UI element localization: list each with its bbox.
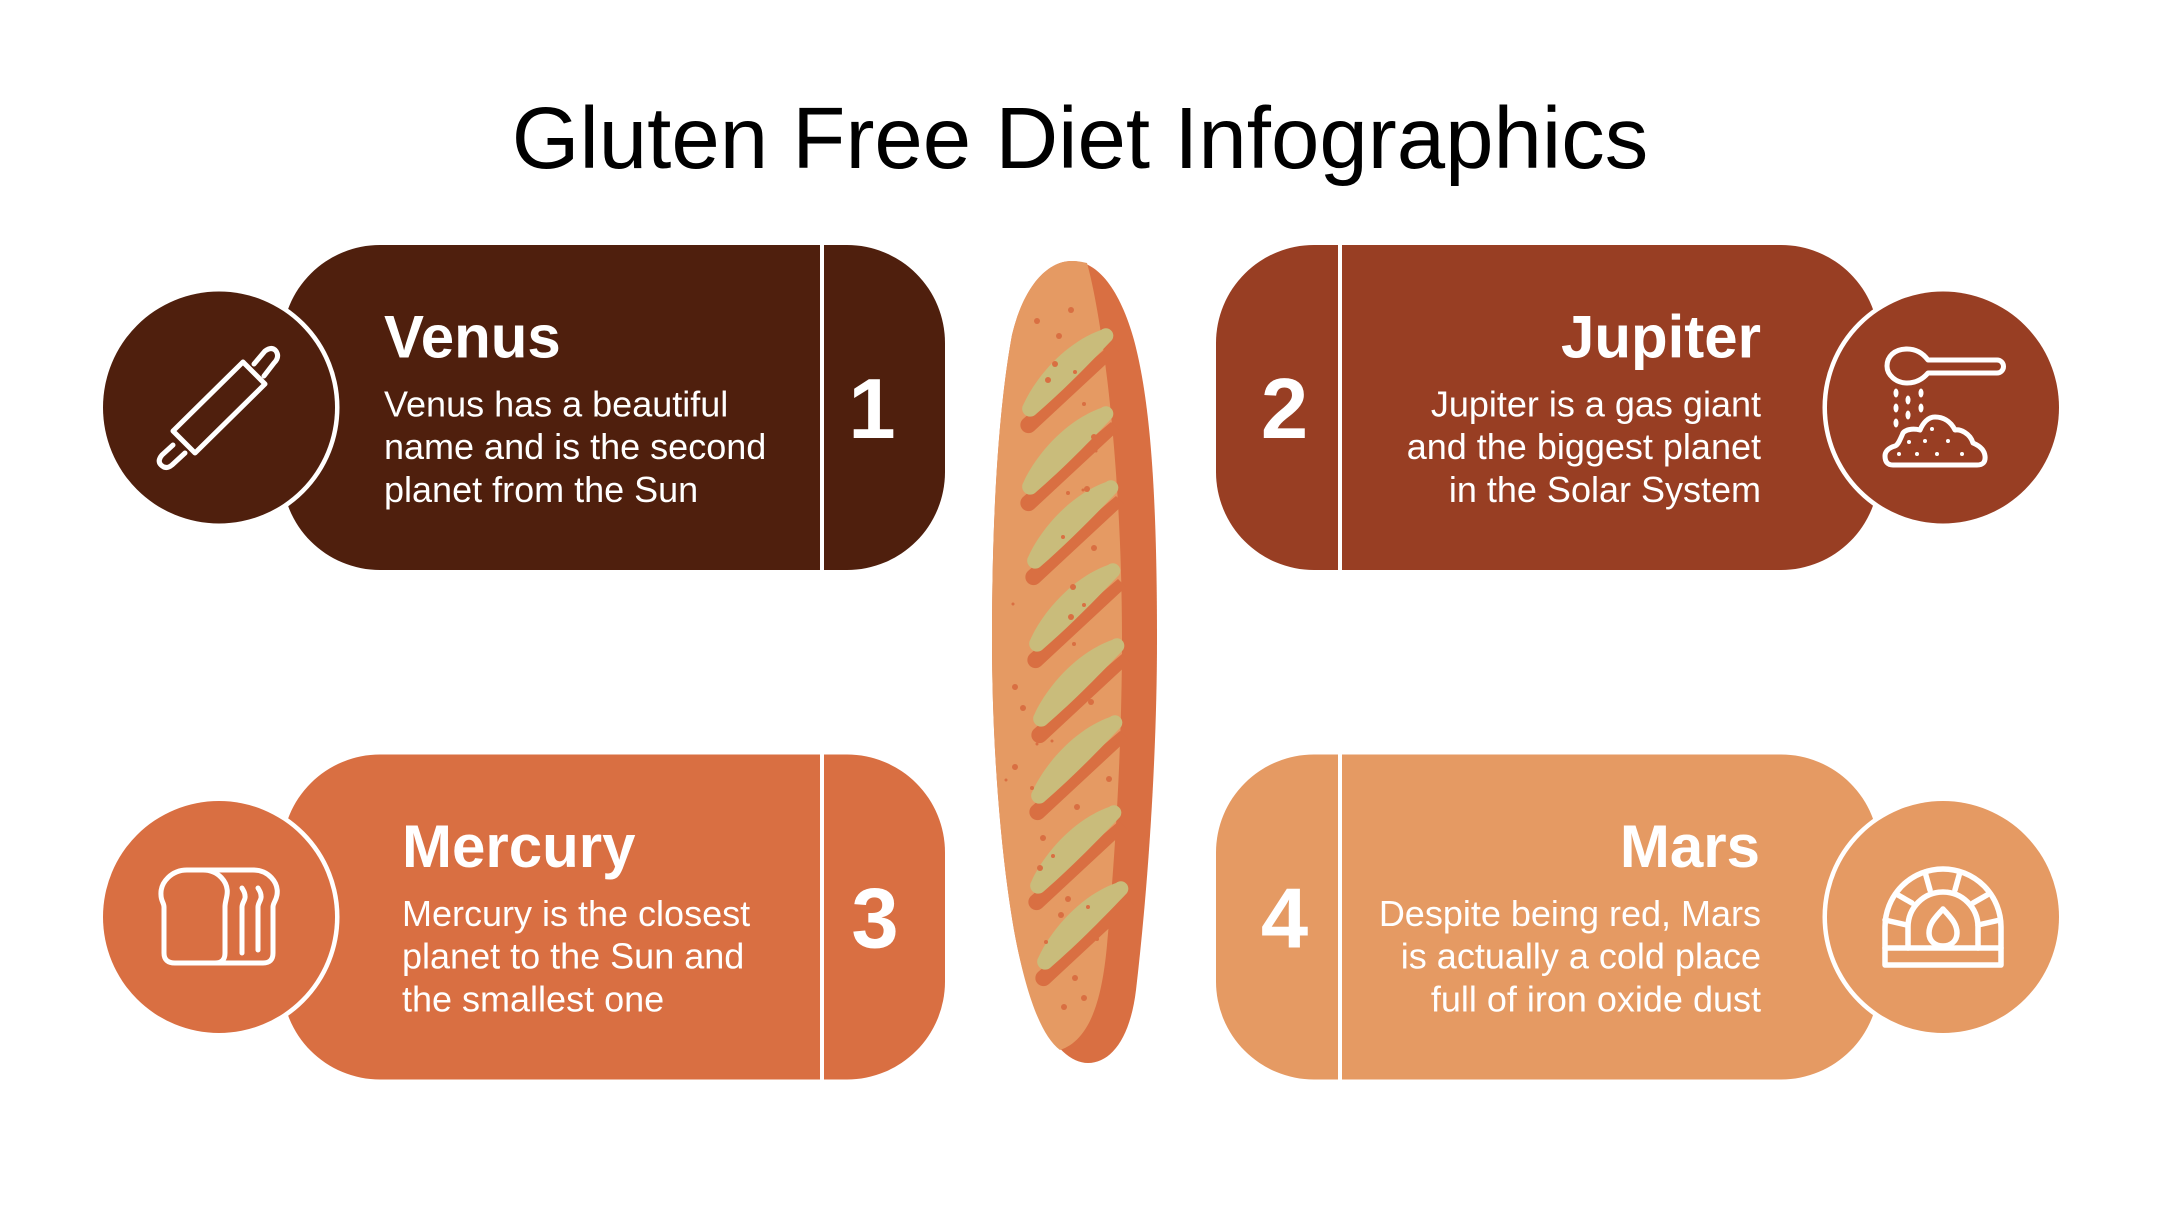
number 4: 4 bbox=[1261, 872, 1308, 966]
text: Venus description: planet from the Sun bbox=[384, 469, 698, 510]
text: Jupiter description: Jupiter is a gas giant bbox=[1431, 384, 1761, 424]
icon: bread loaf bbox=[161, 870, 277, 963]
panel: Mars bbox=[1216, 754, 2061, 1080]
text: Venus description: name and is the second bbox=[384, 426, 766, 467]
panel: Jupiter bbox=[1216, 245, 2061, 570]
heading: Mercury: Mercury bbox=[402, 813, 636, 880]
panel: Mercury bbox=[101, 754, 945, 1080]
number 1: 1 bbox=[848, 362, 896, 457]
title: Gluten Free Diet Infographics bbox=[512, 90, 1648, 187]
number 2: 2 bbox=[1261, 362, 1308, 457]
text: Mercury description: Mercury is the closest bbox=[402, 893, 750, 934]
text: Mars description: full of iron oxide dust bbox=[1431, 978, 1761, 1020]
text: Mars description: is actually a cold place bbox=[1401, 936, 1761, 976]
icon: spoon and flour bbox=[1885, 349, 2004, 465]
heading: Venus: Venus bbox=[384, 304, 561, 370]
heading: Mars: Mars bbox=[1620, 813, 1760, 880]
text: Mercury description: the smallest one bbox=[402, 978, 664, 1020]
text: Jupiter description: and the biggest planet bbox=[1407, 426, 1761, 467]
icon: brick oven bbox=[1885, 869, 2001, 965]
text: Jupiter description: in the Solar System bbox=[1449, 469, 1761, 510]
panel: Venus bbox=[101, 245, 945, 570]
text: Mars description: Despite being red, Mars bbox=[1379, 893, 1761, 934]
icon: rolling pin bbox=[159, 348, 278, 468]
text: Venus description: Venus has a beautiful bbox=[384, 384, 728, 424]
text: Mercury description: planet to the Sun and bbox=[402, 936, 744, 976]
heading: Jupiter: Jupiter bbox=[1561, 304, 1761, 370]
illustration: baguette bbox=[992, 261, 1157, 1063]
number 3: 3 bbox=[851, 872, 899, 966]
